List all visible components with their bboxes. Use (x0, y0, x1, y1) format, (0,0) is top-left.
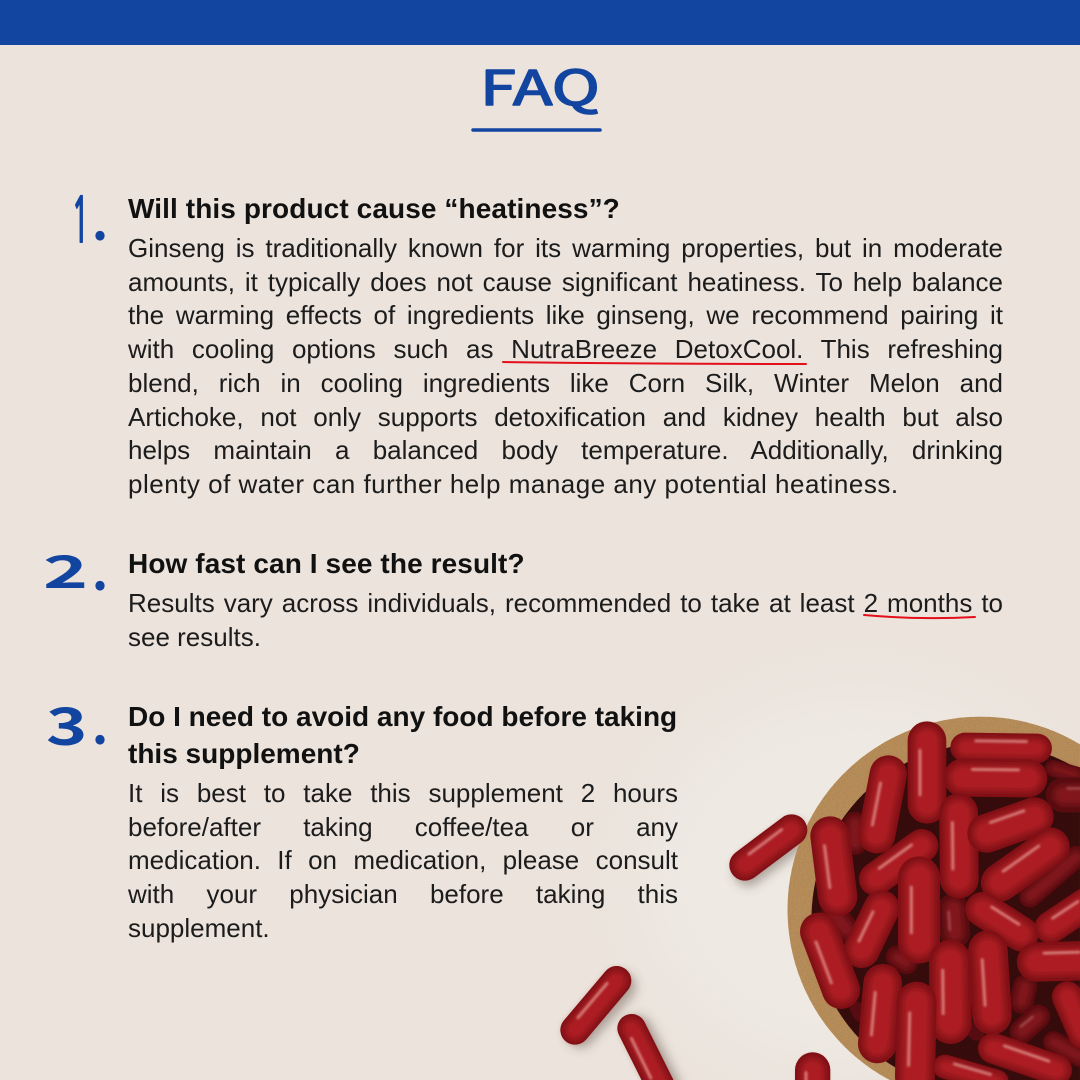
text block: answer 1: with cooling options such as NutraBreeze DetoxCool. This refreshing (128, 334, 1003, 364)
number 3: . (92, 687, 108, 759)
capsules in bowl, back layer (833, 768, 1080, 1057)
text block: answer 1: the warming effects of ingredients like ginseng, we recommend pairing it (128, 300, 1003, 330)
loose capsules shadow (748, 837, 795, 872)
text block: answer 1: blend, rich in cooling ingredients like Corn Silk, Winter Melon and (128, 368, 1003, 398)
text block: answer 3: before/after taking coffee/tea or any (128, 812, 678, 842)
number 2: 2 (43, 536, 88, 600)
text block: answer 2: Results vary across individuals, recommended to take at least 2 months to (128, 588, 1003, 618)
text block: answer 1: helps maintain a balanced body temperature. Additionally, drinking (128, 435, 1003, 465)
number 2 (43, 533, 108, 600)
heading: question 2: How fast can I see the result? (128, 548, 525, 579)
capsules in bowl, front layer (813, 741, 1080, 1080)
heading: question 1: Will this product cause “heatiness”? (128, 193, 620, 224)
bowl (788, 717, 1080, 1080)
text block: answer 3: It is best to take this supplement 2 hours (128, 778, 678, 808)
text block: answer 3 (128, 778, 678, 943)
text block: answer 1: Ginseng is traditionally known for its warming properties, but in moderate (128, 233, 1003, 263)
text block: answer 2: see results. (128, 622, 261, 652)
text block: answer 3: with your physician before taking this (128, 879, 678, 909)
loose capsule left of bowl (742, 824, 792, 865)
text block: answer 3: supplement. (128, 913, 270, 943)
number 1 (71, 183, 108, 250)
heading: question 3: this supplement? (128, 738, 360, 769)
heading: question 3: Do I need to avoid any food before taking (128, 701, 677, 732)
text block: answer 1: amounts, it typically does not cause significant heatiness. To help balance (128, 267, 1003, 297)
loose capsule below bowl (806, 1067, 813, 1080)
top banner (0, 0, 1080, 45)
text block: answer 2 (128, 588, 1003, 652)
red underlines (502, 361, 976, 620)
number 3 (46, 684, 108, 760)
title: FAQ: FAQ (480, 50, 600, 119)
text block: answer 3: medication. If on medication, please consult (128, 845, 678, 875)
loose capsules bottom centre (572, 976, 667, 1080)
heading: question 3 (128, 701, 677, 769)
text block: answer 1 (128, 233, 1003, 499)
text block: answer 1: Artichoke, not only supports detoxification and kidney health but also (128, 402, 1003, 432)
number 3: 3 (46, 684, 87, 760)
light background glow (640, 690, 1080, 1070)
text block: answer 1: plenty of water can further help manage any potential heatiness. (128, 469, 899, 499)
